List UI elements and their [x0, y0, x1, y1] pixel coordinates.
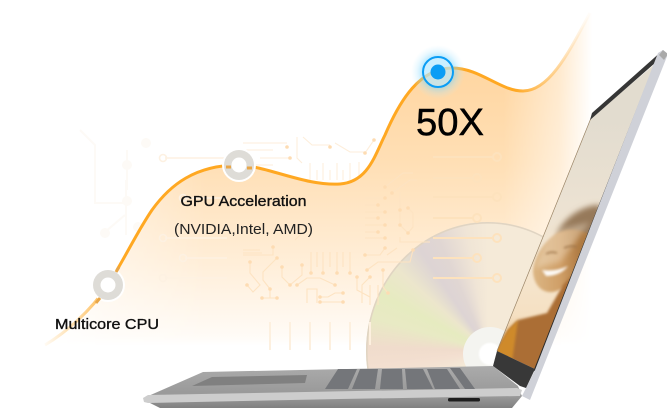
bottom bezel — [493, 351, 535, 388]
keyboard — [325, 368, 475, 389]
hair — [554, 202, 600, 235]
port — [448, 398, 480, 402]
smile — [542, 266, 568, 276]
glass edge line — [497, 118, 591, 351]
face — [533, 229, 590, 292]
screen image — [490, 63, 656, 372]
trackpad — [192, 375, 307, 386]
chart area fill — [89, 20, 587, 337]
marker: multicore — [91, 267, 125, 303]
label: GPU Acceleration: GPU Acceleration — [180, 193, 306, 210]
laptop — [143, 50, 667, 408]
front lip — [143, 388, 522, 403]
neck and body — [498, 276, 570, 368]
glare — [535, 222, 590, 268]
disc — [366, 222, 543, 368]
top bezel — [590, 50, 663, 120]
marker: 50x — [411, 45, 465, 99]
label: multicore: Multicore CPU — [55, 316, 159, 333]
label: 50X: 50X — [416, 102, 484, 144]
deck — [146, 366, 520, 397]
marker: gpu — [222, 148, 256, 182]
base — [146, 392, 522, 408]
label: vendors: (NVIDIA,Intel, AMD) — [174, 222, 313, 238]
lid edge — [522, 50, 667, 400]
